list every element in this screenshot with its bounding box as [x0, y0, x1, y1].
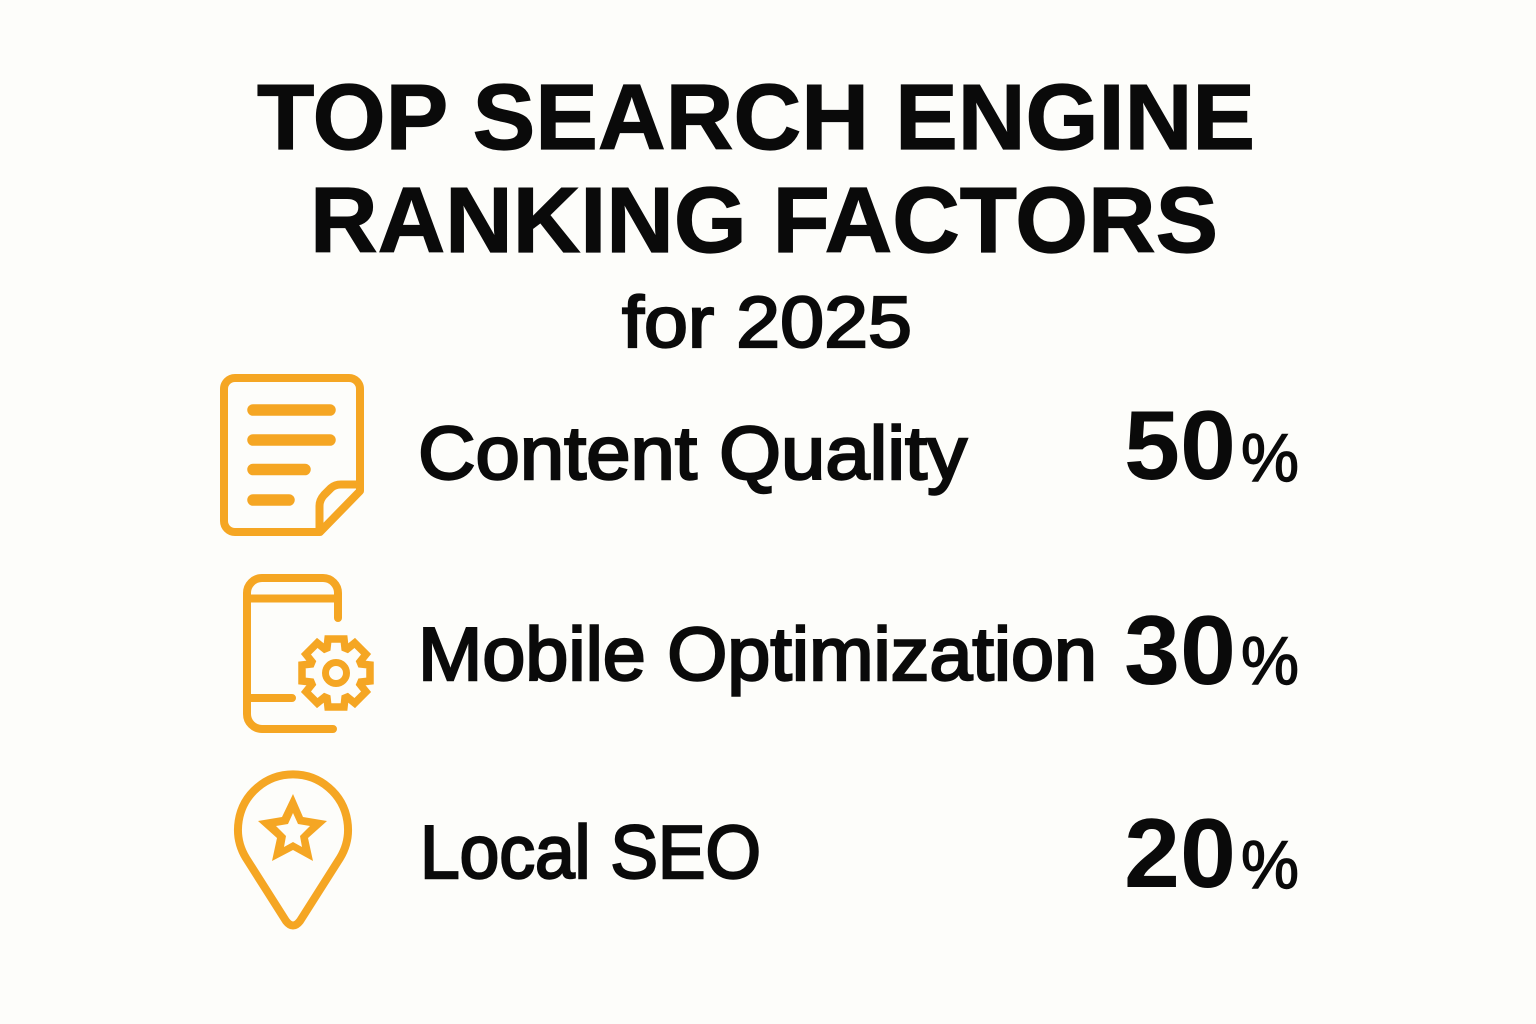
value: 50%: 50 [1124, 390, 1236, 500]
label: content quality: Content Quality [418, 411, 968, 495]
label: mobile optimization: Mobile Optimization [418, 612, 1097, 696]
row: content quality [224, 378, 1299, 532]
icon: document [224, 378, 360, 532]
value: 20%: % [1241, 827, 1299, 903]
label: local seo: Local SEO [420, 810, 761, 894]
value: 30% [1124, 595, 1299, 705]
value: 30%: 30 [1124, 595, 1236, 705]
row: local seo [238, 774, 1299, 926]
row: mobile optimization [247, 578, 1299, 729]
title: TOP SEARCH ENGINE [257, 65, 1255, 169]
value: 30%: % [1241, 623, 1299, 699]
value: 20%: 20 [1124, 798, 1236, 908]
value: 50%: % [1241, 420, 1299, 496]
value: 20% [1124, 798, 1299, 908]
title [257, 65, 1255, 272]
icon: map pin with star [238, 774, 348, 926]
subtitle: for 2025 [622, 283, 912, 363]
value: 50% [1124, 390, 1299, 500]
title: RANKING FACTORS [310, 168, 1218, 272]
icon: phone with gear [247, 578, 370, 729]
